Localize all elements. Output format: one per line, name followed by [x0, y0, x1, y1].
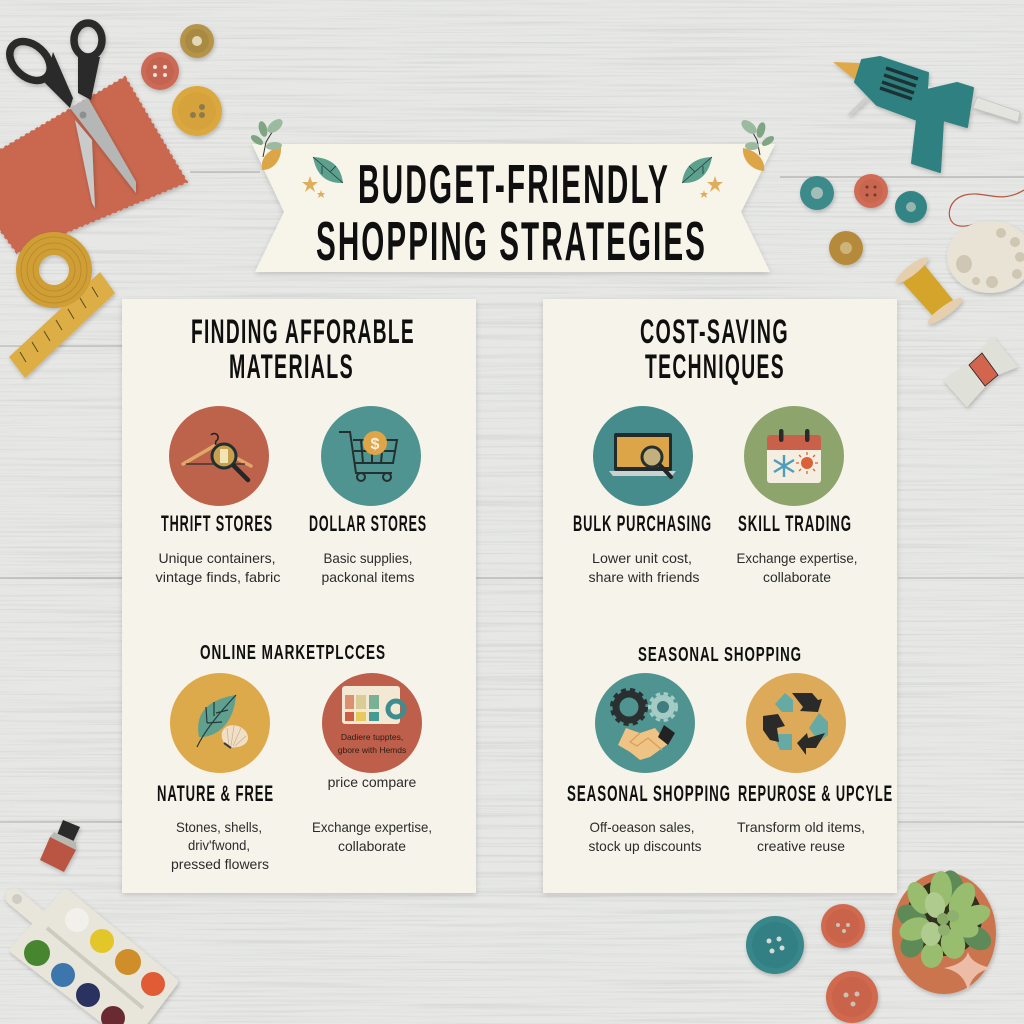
text: exchange expertise detail: collaborate — [338, 838, 406, 854]
glue stick — [40, 820, 80, 872]
text: nature and free detail: driv'fwond, — [188, 837, 250, 853]
icon: paint swatches price compare — [322, 673, 422, 773]
text: nature and free detail — [171, 819, 269, 872]
panel heading: TECHNIQUES — [645, 348, 785, 386]
text: seasonal shopping detail: Off-oeason sales, — [590, 819, 694, 835]
label: dollar stores: DOLLAR STORES — [309, 511, 427, 536]
subheading: seasonal shopping: SEASONAL SHOPPING — [638, 644, 802, 666]
scissors — [2, 23, 136, 208]
text: seasonal shopping detail — [588, 819, 702, 854]
text: dollar stores detail: Basic supplies, — [324, 550, 412, 566]
text: nature and free detail: Stones, shells, — [176, 819, 262, 835]
text: skill trading detail — [736, 550, 858, 585]
clay palette with red thread — [947, 190, 1024, 293]
title text: BUDGET-FRIENDLY — [358, 153, 670, 215]
buttons top left — [141, 24, 222, 136]
text: exchange expertise detail: Exchange expertise, — [312, 819, 432, 835]
banner leaf right — [682, 157, 712, 183]
text: dollar stores detail: packonal items — [322, 569, 414, 585]
tape measure — [9, 237, 115, 378]
label: seasonal shopping: SEASONAL SHOPPING — [567, 781, 731, 806]
panel heading: FINDING AFFORABLE — [191, 313, 415, 351]
text: thrift stores detail — [156, 550, 280, 585]
label: nature and free: NATURE & FREE — [157, 781, 274, 806]
icon: shopping cart with coin: $ — [371, 436, 380, 453]
icon: recycle arrows — [746, 673, 846, 773]
icon: leaf and shell — [170, 673, 270, 773]
text: exchange expertise detail — [312, 819, 432, 854]
label: skill trading: SKILL TRADING — [738, 511, 852, 536]
succulent in terracotta pot — [892, 868, 996, 994]
text: seasonal shopping detail: stock up discounts — [588, 838, 702, 854]
text: bulk purchasing detail: Lower unit cost, — [592, 550, 692, 566]
panel heading — [191, 313, 415, 386]
fabric swatch — [0, 77, 187, 253]
text: thrift stores detail: Unique containers, — [158, 550, 276, 566]
text: thrift stores detail: vintage finds, fabric — [156, 569, 280, 585]
paint tube — [943, 337, 1018, 407]
icon: calendar — [744, 406, 844, 506]
label: thrift stores: THRIFT STORES — [161, 511, 273, 536]
text: bulk purchasing detail — [588, 550, 700, 585]
icon: shopping cart with coin — [321, 406, 421, 506]
icon: paint swatches price compare: gbore with Hemds — [338, 745, 406, 755]
text: repurpose detail: Transform old items, — [737, 819, 865, 835]
thread spool — [893, 254, 965, 327]
panel heading: COST-SAVING — [640, 313, 789, 351]
subheading: online marketplaces: ONLINE MARKETPLCCES — [200, 642, 386, 664]
title banner — [249, 116, 776, 272]
text: skill trading detail: Exchange expertise, — [736, 550, 858, 566]
stars right — [700, 176, 723, 198]
panel: cost-saving techniques — [543, 299, 897, 893]
icon: laptop with magnifier — [593, 406, 693, 506]
title text — [316, 153, 707, 272]
icon: hanger with magnifier — [169, 406, 269, 506]
buttons top right — [800, 174, 927, 265]
watercolor paint palette — [12, 893, 174, 1024]
text: repurpose detail: creative reuse — [757, 838, 845, 854]
text: nature and free detail: pressed flowers — [171, 856, 269, 872]
text: repurpose detail — [737, 819, 865, 854]
sprig right — [739, 117, 776, 171]
text: bulk purchasing detail: share with friends — [588, 569, 700, 585]
icon: paint swatches price compare: Dadiere tupptes, — [341, 732, 403, 742]
glue gun — [833, 57, 1020, 172]
panel heading — [640, 313, 789, 386]
label: repurpose and upcycle: REPUROSE & UPCYLE — [738, 781, 893, 806]
text: price compare: price compare — [328, 774, 417, 790]
title text: SHOPPING STRATEGIES — [316, 210, 707, 272]
sprig left — [249, 116, 285, 170]
banner leaf left — [313, 157, 343, 183]
icon: gears and handshake — [595, 673, 695, 773]
panel: finding affordable materials — [122, 299, 476, 893]
stars left — [302, 176, 325, 198]
label: bulk purchasing: BULK PURCHASING — [573, 511, 712, 536]
text: dollar stores detail — [322, 550, 414, 585]
buttons bottom right — [746, 904, 878, 1023]
text: skill trading detail: collaborate — [763, 569, 831, 585]
panel heading: MATERIALS — [229, 348, 354, 386]
